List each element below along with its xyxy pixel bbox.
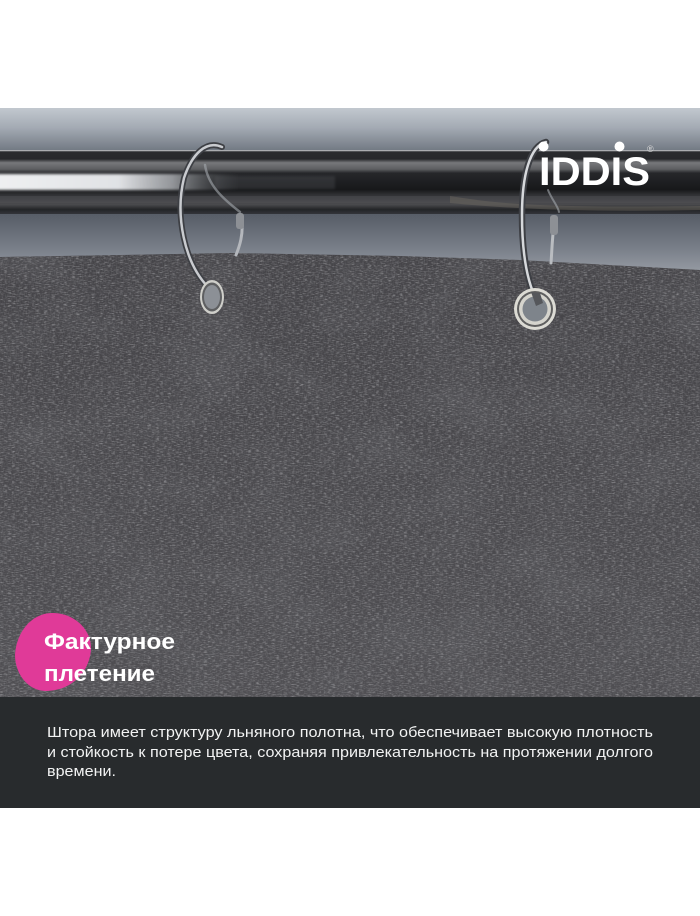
text block: description — [47, 724, 653, 780]
icon: right curtain ring — [514, 142, 559, 330]
accent: pink blob — [15, 613, 91, 691]
photo: chrome curtain rod — [0, 150, 700, 214]
text block: description: времени. — [47, 763, 116, 780]
photo: wall behind the rod — [0, 108, 700, 273]
icon: left curtain ring — [181, 145, 244, 314]
infographic canvas — [0, 108, 700, 808]
text block: description: и стойкость к потере цвета, сохраняя привлекательность на протяжении долгого — [47, 744, 653, 761]
icon: left grommet — [200, 280, 224, 314]
photo: grey textured curtain fabric — [0, 250, 700, 697]
heading: Фактурное плетение: Фактурное — [44, 629, 175, 654]
text block: description: Штора имеет структуру льняного полотна, что обеспечивает высокую плотность — [47, 724, 653, 741]
heading: Фактурное плетение: плетение — [44, 661, 155, 686]
icon: right grommet — [514, 288, 556, 330]
panel: description — [0, 697, 700, 808]
logo: IDDIS: IDDIS — [539, 150, 650, 194]
heading: Фактурное плетение — [44, 629, 175, 686]
logo: IDDIS: ® — [647, 144, 654, 154]
